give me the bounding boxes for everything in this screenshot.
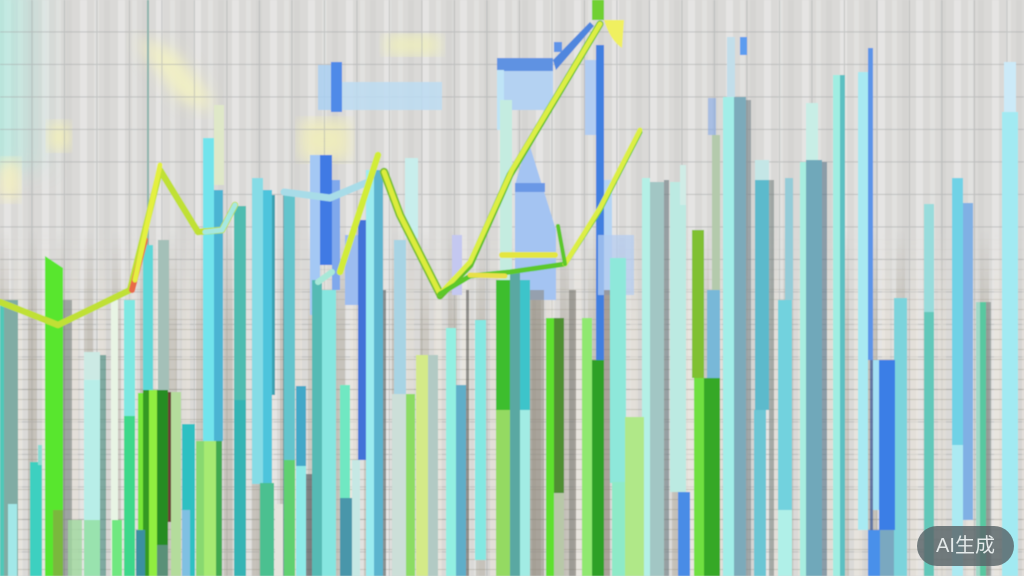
dark bar shadows [63, 100, 991, 576]
pale curved line [284, 182, 368, 198]
blue background shapes [310, 22, 973, 520]
badge: AI generated [917, 526, 1014, 566]
strong blue bars [678, 360, 895, 576]
tip marker [318, 272, 332, 282]
trend lines [0, 24, 640, 325]
green bars [45, 230, 986, 576]
second rising line [440, 130, 640, 294]
left line [0, 165, 235, 325]
arrow head [592, 0, 624, 48]
badge: AI generated: AI生成 [936, 535, 995, 557]
main rising line [340, 24, 600, 296]
